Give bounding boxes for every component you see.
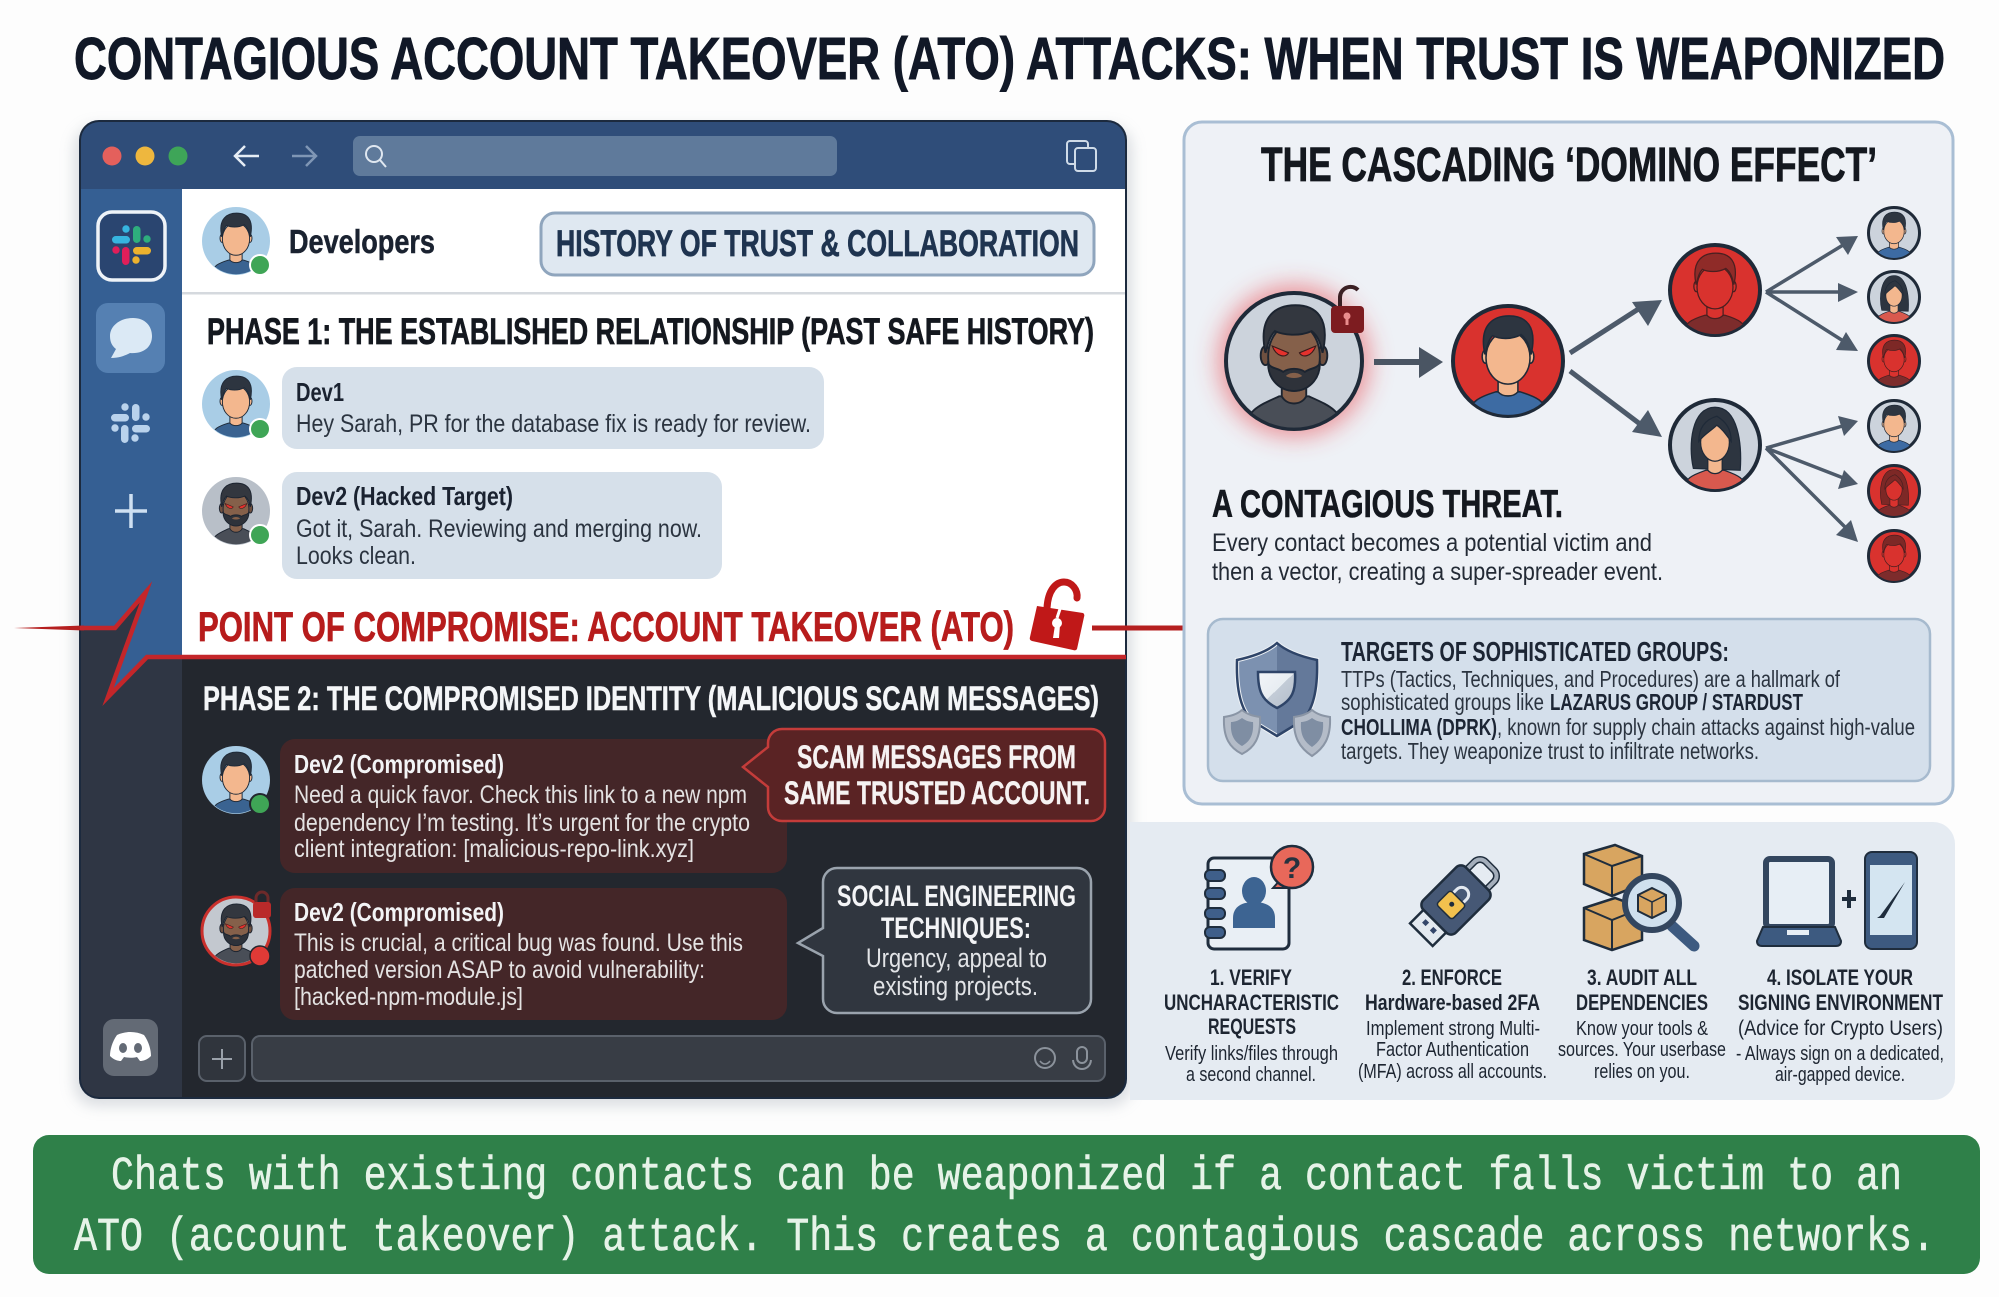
heading: phase 2: PHASE 2: THE COMPROMISED IDENTITY (MALICIOUS SCAM MESSAGES) bbox=[203, 680, 1099, 718]
message: Dev2 hacked target: Looks clean. bbox=[296, 542, 416, 570]
banner: key takeaway bbox=[33, 1135, 1980, 1274]
icon: shields bbox=[1224, 643, 1330, 756]
callout: social engineering: Urgency, appeal to bbox=[866, 943, 1047, 973]
text: step 4: 4. ISOLATE YOUR bbox=[1767, 965, 1913, 990]
icon: slack mono bbox=[111, 403, 150, 443]
sidebar: dark part bbox=[81, 592, 182, 1097]
callout: social engineering bbox=[798, 868, 1091, 1013]
message: Dev2 compromised 2: patched version ASAP to avoid vulnerability: bbox=[294, 956, 705, 984]
icon: hardware key bbox=[1405, 850, 1506, 951]
icon: contact book with question: ? bbox=[1283, 852, 1301, 885]
icon: chat bubble bbox=[96, 303, 165, 373]
text: targets bbox=[1341, 636, 1915, 764]
message: Dev2 compromised 1: client integration: [malicious-repo-link.xyz] bbox=[294, 835, 694, 863]
text: targets: CHOLLIMA (DPRK) bbox=[1341, 714, 1497, 740]
text: a contagious threat bbox=[1212, 483, 1663, 586]
callout: social engineering: existing projects. bbox=[873, 971, 1038, 1001]
callout: social engineering: SOCIAL ENGINEERING bbox=[837, 880, 1076, 913]
message: Dev2 compromised 1 bbox=[202, 739, 787, 873]
panel: chat application window bbox=[74, 120, 1132, 1106]
icon: slack workspace bbox=[98, 212, 165, 280]
icon: add workspace bbox=[115, 494, 147, 528]
window title bar bbox=[81, 122, 1125, 189]
diagram: cascade network bbox=[1218, 208, 1920, 583]
message: Dev2 compromised 1: Dev2 (Compromised) bbox=[294, 749, 504, 779]
callout: scam messages bbox=[743, 729, 1105, 821]
text: targets: LAZARUS GROUP / STARDUST bbox=[1550, 689, 1803, 715]
text: step 1: a second channel. bbox=[1186, 1064, 1316, 1086]
message: Dev1 bbox=[202, 367, 824, 449]
message: Dev2 compromised 1: Need a quick favor. Check this link to a new npm bbox=[294, 781, 747, 809]
text: targets: targets. They weaponize trust to infiltrate networks. bbox=[1341, 738, 1759, 764]
text: targets: TARGETS OF SOPHISTICATED GROUPS: bbox=[1341, 636, 1729, 667]
text: step 4: - Always sign on a dedicated, bbox=[1736, 1043, 1944, 1065]
text: step 4: SIGNING ENVIRONMENT bbox=[1738, 990, 1943, 1015]
text: step 2: 2. ENFORCE bbox=[1402, 965, 1502, 990]
heading: phase 1: PHASE 1: THE ESTABLISHED RELATIONSHIP (PAST SAFE HISTORY) bbox=[207, 311, 1094, 352]
content: safe history background bbox=[182, 189, 1125, 658]
callout: point of compromise: POINT OF COMPROMISE: ACCOUNT TAKEOVER (ATO) bbox=[198, 603, 1014, 650]
icon: laptop plus phone bbox=[1757, 852, 1917, 949]
icon: boxes with magnifier bbox=[1584, 845, 1694, 950]
text: step 3: sources. Your userbase bbox=[1558, 1039, 1726, 1061]
badge: history of trust bbox=[541, 213, 1094, 275]
callout: scam messages: SAME TRUSTED ACCOUNT. bbox=[784, 775, 1090, 811]
header: developers channel bbox=[202, 207, 435, 276]
text: step 3 bbox=[1558, 965, 1726, 1083]
text: step 4: (Advice for Crypto Users) bbox=[1738, 1017, 1943, 1040]
message: Dev1: Hey Sarah, PR for the database fix is ready for review. bbox=[296, 410, 811, 438]
text: a contagious threat: Every contact becomes a potential victim and bbox=[1212, 529, 1652, 557]
text: a contagious threat: then a vector, creating a super-spreader event. bbox=[1212, 558, 1663, 586]
callout: social engineering: TECHNIQUES: bbox=[881, 912, 1031, 945]
icon: discord bbox=[103, 1019, 158, 1076]
text: targets: sophisticated groups like bbox=[1341, 689, 1544, 715]
message: Dev2 hacked target: Got it, Sarah. Reviewing and merging now. bbox=[296, 515, 702, 543]
text: step 2: Implement strong Multi- bbox=[1366, 1018, 1540, 1040]
panel: targets of sophisticated groups bbox=[1208, 619, 1930, 781]
text: step 1: UNCHARACTERISTIC bbox=[1164, 990, 1339, 1015]
icon: contact book with question bbox=[1205, 846, 1313, 949]
message: Dev2 hacked target: Dev2 (Hacked Target) bbox=[296, 481, 513, 511]
pulse line: compromise bbox=[14, 592, 1183, 697]
message: Dev2 hacked target bbox=[202, 472, 722, 579]
content: compromised background bbox=[182, 658, 1125, 1097]
text: step 1: Verify links/files through bbox=[1165, 1043, 1338, 1065]
message input bar bbox=[199, 1036, 1105, 1081]
text: step 3: 3. AUDIT ALL bbox=[1587, 965, 1697, 990]
text: step 3: relies on you. bbox=[1594, 1061, 1690, 1083]
text: step 1 bbox=[1164, 965, 1339, 1086]
panel: domino effect bbox=[1184, 122, 1953, 804]
text: step 2: (MFA) across all accounts. bbox=[1358, 1061, 1547, 1083]
icon: open red padlock bbox=[1030, 582, 1084, 650]
message: Dev2 compromised 2: This is crucial, a critical bug was found. Use this bbox=[294, 929, 743, 957]
message: Dev2 compromised 1: dependency I’m testing. It’s urgent for the crypto bbox=[294, 809, 750, 837]
badge: history of trust: HISTORY OF TRUST & COLLABORATION bbox=[556, 223, 1079, 264]
text: targets: TTPs (Tactics, Techniques, and Procedures) are a hallmark of bbox=[1341, 666, 1840, 692]
text: a contagious threat: A CONTAGIOUS THREAT. bbox=[1212, 483, 1563, 526]
message: Dev2 compromised 2 bbox=[202, 888, 787, 1020]
sidebar: light part bbox=[81, 189, 182, 699]
message: Dev1: Dev1 bbox=[296, 377, 344, 407]
text: step 3: Know your tools & bbox=[1576, 1018, 1709, 1040]
message: Dev2 compromised 2: Dev2 (Compromised) bbox=[294, 897, 504, 927]
text: step 3: DEPENDENCIES bbox=[1576, 990, 1708, 1015]
callout: scam messages: SCAM MESSAGES FROM bbox=[797, 739, 1076, 775]
header: developers channel: Developers bbox=[289, 223, 435, 260]
message: Dev2 compromised 2: [hacked-npm-module.js] bbox=[294, 983, 523, 1011]
text: step 1: 1. VERIFY bbox=[1210, 965, 1292, 990]
text: step 4 bbox=[1736, 965, 1944, 1086]
text: step 2: Factor Authentication bbox=[1376, 1039, 1529, 1061]
text: step 2 bbox=[1358, 965, 1547, 1083]
panel: defensive measures bbox=[1130, 822, 1955, 1100]
text: step 4: air-gapped device. bbox=[1775, 1064, 1905, 1086]
text: step 1: REQUESTS bbox=[1208, 1014, 1296, 1039]
text: step 2: Hardware-based 2FA bbox=[1365, 990, 1540, 1015]
